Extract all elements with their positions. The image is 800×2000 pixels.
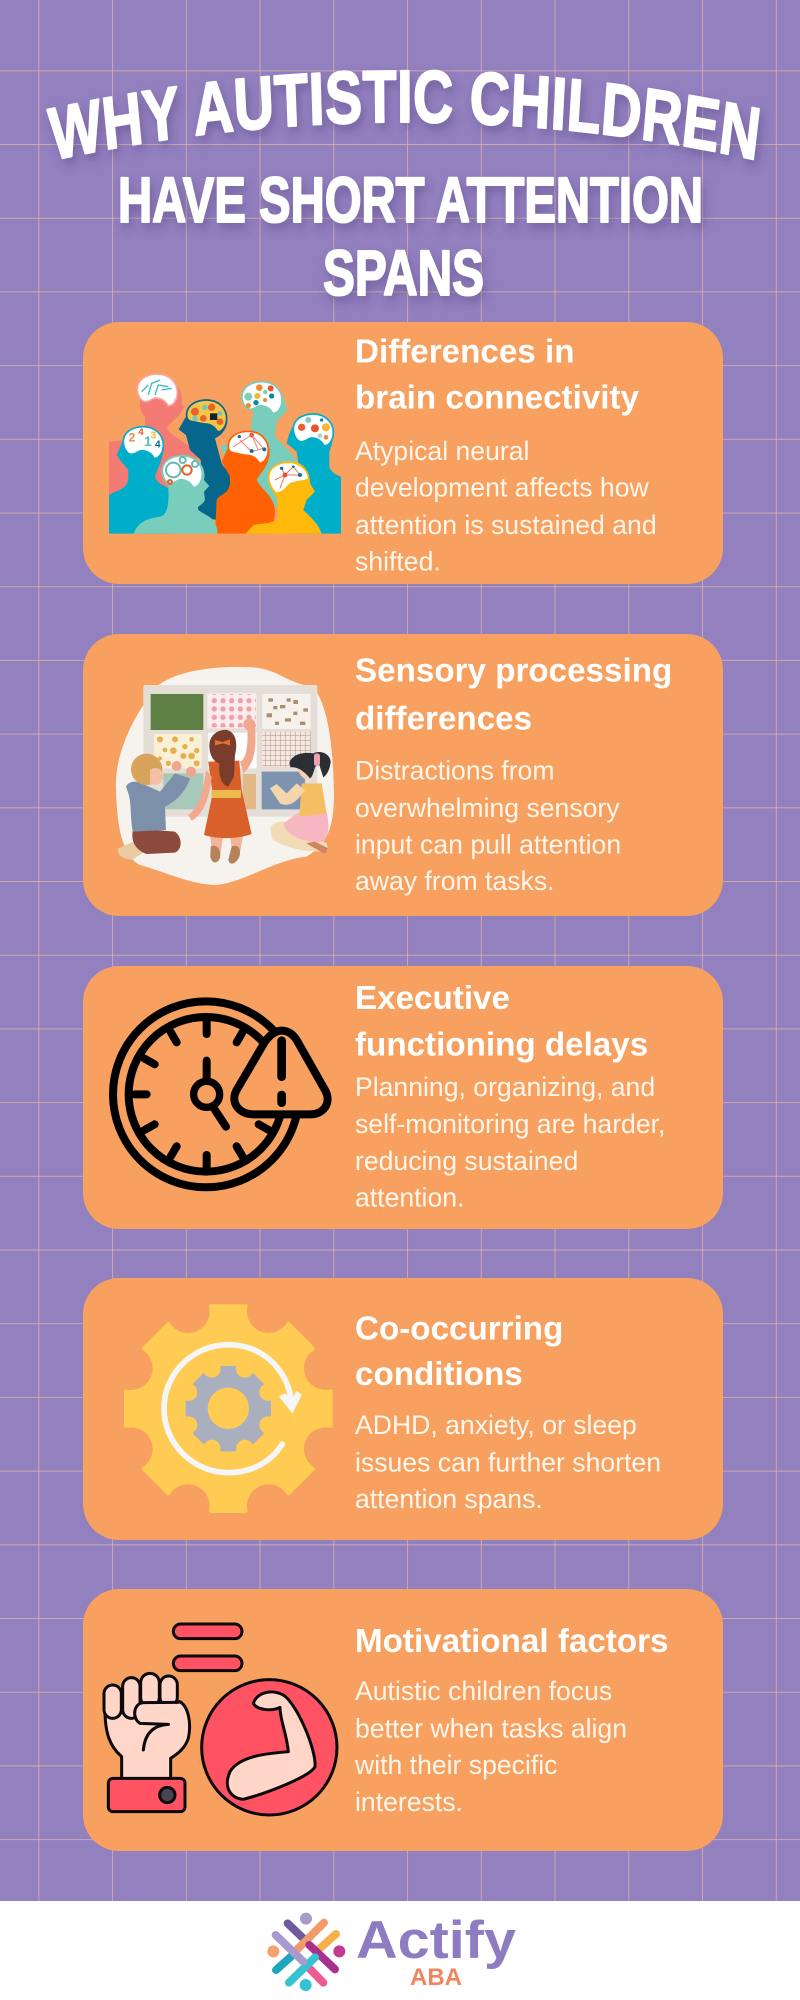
brain contents: 2: [129, 431, 136, 445]
body text: input can pull attention: [355, 830, 621, 860]
panel: executive functioning: functioning delays: [355, 1027, 648, 1064]
illustration: diverse brains: [109, 374, 341, 534]
heading: Executive: [355, 980, 510, 1017]
title: SPANS: [323, 237, 484, 309]
panel: co-occurring conditions: conditions: [355, 1356, 523, 1393]
body text: Atypical neural: [355, 436, 529, 466]
brain contents: 4: [155, 439, 161, 450]
body text: Autistic children focus: [355, 1676, 612, 1706]
icon: fist and flexed arm: [104, 1624, 337, 1815]
body text: Distractions from: [355, 755, 554, 785]
brain contents: 1: [144, 433, 152, 449]
logo wordmark: Actify: [356, 1911, 517, 1970]
pink figure: [109, 377, 197, 495]
cyan right figure: [280, 413, 341, 534]
illustration: children at sensory wall: [116, 667, 334, 885]
panel: sensory processing: [83, 634, 723, 916]
body text: development affects how: [355, 473, 649, 503]
body text: interests.: [355, 1787, 463, 1817]
board: [143, 685, 317, 817]
footer band: [0, 1901, 800, 2000]
heading: Motivational factors: [355, 1623, 668, 1660]
body text: attention spans.: [355, 1484, 543, 1514]
tiles: [151, 694, 203, 730]
body text: ADHD, anxiety, or sleep: [355, 1410, 637, 1440]
body text: better when tasks align: [355, 1713, 627, 1743]
body text: with their specific: [354, 1750, 557, 1780]
panel: co-occurring conditions: [83, 1278, 723, 1540]
body text: shifted.: [355, 547, 441, 577]
white blob: [116, 667, 334, 885]
body text: attention.: [355, 1183, 464, 1213]
body text: away from tasks.: [355, 866, 555, 896]
girl right: [270, 752, 331, 854]
title: [46, 70, 764, 309]
boy: [118, 754, 196, 860]
brain contents: 3: [151, 430, 157, 441]
logo subtext: ABA: [410, 1964, 462, 1991]
blue left figure: [109, 427, 173, 534]
mint back figure: [220, 381, 302, 507]
panel: sensory processing: differences: [355, 700, 532, 738]
icon: clock with warning: [113, 1001, 328, 1187]
logo: Actify ABA: [267, 1911, 517, 1991]
heading: Sensory processing: [355, 653, 672, 690]
heading: Co-occurring: [355, 1311, 563, 1348]
heading: Differences in: [355, 334, 574, 371]
mint front figure: [134, 455, 218, 534]
title: WHY AUTISTIC CHILDREN: [46, 70, 764, 167]
panel: brain connectivity: brain connectivity: [355, 380, 640, 417]
girl center: [188, 718, 256, 864]
orange figure: [215, 433, 275, 534]
panel: executive functioning: [83, 966, 723, 1229]
body text: reducing sustained: [355, 1146, 578, 1176]
body text: attention is sustained and: [355, 510, 657, 540]
yellow figure: [246, 461, 322, 534]
dark blue figure: [179, 401, 239, 520]
brain contents: [129, 380, 330, 488]
icon: gear with cycle arrow: [126, 1306, 331, 1511]
logo mark: [267, 1913, 345, 1991]
brains: [123, 374, 333, 493]
brain contents: 4: [138, 427, 144, 437]
panel: motivational factors: [83, 1589, 723, 1851]
panel: brain connectivity: [83, 322, 723, 584]
body text: issues can further shorten: [355, 1447, 661, 1477]
body text: Planning, organizing, and: [355, 1072, 655, 1102]
body text: self-monitoring are harder,: [355, 1109, 665, 1139]
body text: overwhelming sensory: [355, 793, 620, 823]
